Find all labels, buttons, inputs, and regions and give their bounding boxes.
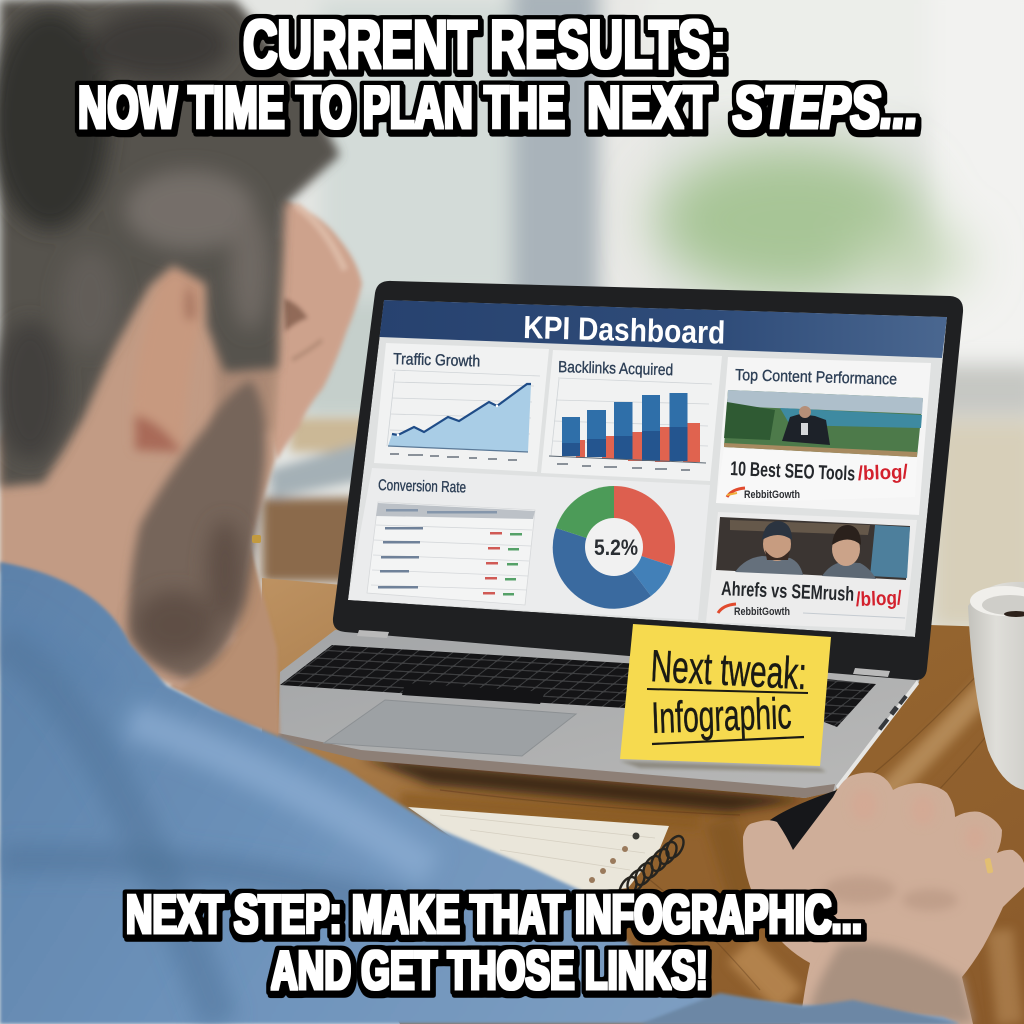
card 1 text — [726, 461, 908, 498]
bar chart: backlinks — [549, 393, 706, 471]
laptop lid — [333, 281, 963, 680]
bracelet — [252, 535, 261, 543]
notebook — [408, 807, 687, 902]
laptop base — [278, 630, 922, 798]
card 2 photo: two men smiling — [716, 517, 910, 580]
caption: now time to plan the next steps: STEPS... — [733, 74, 918, 141]
panel: backlinks acquired — [541, 350, 722, 481]
card 2 text: RebbitGowth — [734, 606, 790, 618]
heading: traffic growth: Traffic Growth — [393, 351, 480, 370]
line chart: traffic growth — [388, 384, 531, 461]
caption: current results: CURRENT RESULTS: — [243, 6, 726, 83]
heading: backlinks acquired: Backlinks Acquired — [558, 359, 673, 379]
man: denim shirt — [0, 562, 960, 1024]
sleeve at wrist — [640, 993, 960, 1024]
man: beard — [129, 380, 265, 679]
card 2 text: /blog/ — [855, 587, 903, 611]
card 1 text: RebbitGowth — [744, 489, 800, 501]
keyboard — [280, 645, 876, 727]
panel: second content card — [706, 512, 917, 630]
trackpad — [324, 700, 576, 756]
spiral binding — [616, 833, 687, 902]
wooden desk — [262, 578, 1024, 1024]
card 2 text: Ahrefs vs SEMrush — [721, 578, 855, 606]
right hand on mouse — [743, 772, 1024, 1024]
panel: traffic growth — [374, 343, 549, 472]
card 1 text: /blog/ — [857, 461, 909, 485]
note text: infographic: Infographic — [651, 689, 792, 743]
donut chart: 5.2%: 5.2% — [594, 535, 638, 560]
card 1 photo: man on hillside — [724, 390, 923, 457]
panel: conversion rate — [348, 468, 710, 620]
sticky note — [620, 624, 831, 772]
man: hair — [0, 0, 340, 487]
mouse — [770, 790, 905, 852]
note text: next tweak: Next tweak: — [649, 640, 808, 699]
caption: now time to plan the next steps: NEXT — [587, 74, 712, 141]
man: face and neck — [0, 230, 285, 690]
heading: top content performance: Top Content Performance — [735, 367, 897, 389]
laptop — [278, 281, 963, 812]
dashboard header bar — [379, 300, 947, 358]
card 1 text: 10 Best SEO Tools — [730, 458, 856, 485]
donut chart: 5.2% — [553, 486, 675, 609]
hinge tabs — [357, 630, 890, 677]
caption: now time to plan the next steps: NOW TIME TO PLAN THE — [78, 74, 565, 141]
coffee cup — [968, 582, 1024, 790]
screen: KPI dashboard — [348, 300, 947, 637]
data table — [367, 502, 535, 605]
panel: top content performance — [716, 357, 931, 515]
heading: conversion rate: Conversion Rate — [378, 477, 466, 496]
laptop base shadow — [361, 757, 835, 812]
dashboard title: KPI Dashboard — [523, 309, 726, 351]
man: forearm — [170, 545, 280, 736]
man: ear — [133, 268, 207, 453]
man: raised hand — [260, 198, 362, 460]
caption: and get those links: AND GET THOSE LINKS! — [271, 939, 708, 1001]
